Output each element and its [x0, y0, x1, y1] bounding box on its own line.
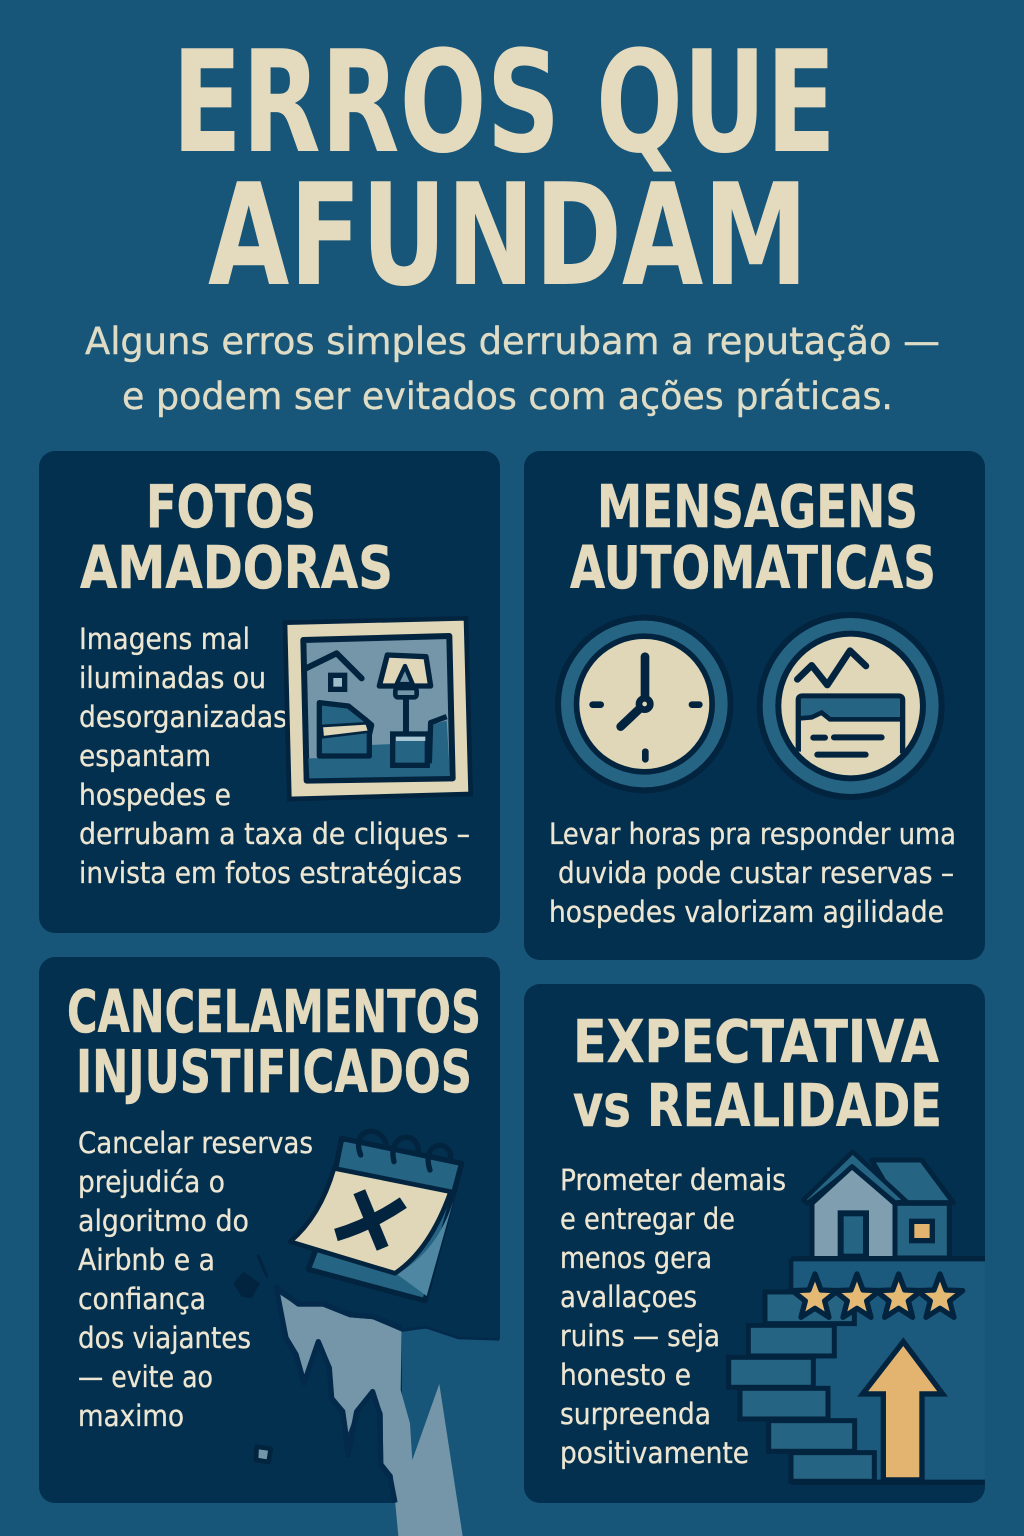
text: expectativa vs realidade: positivamente	[560, 1436, 749, 1470]
panel: mensagens automaticas	[524, 451, 985, 960]
icon: clock	[555, 615, 734, 793]
torn panel corner	[380, 1328, 505, 1536]
text: cancelamentos injustificados: prejudića o	[78, 1165, 225, 1199]
panel: fotos amadoras	[39, 451, 500, 933]
heading: expectativa vs realidade	[573, 1007, 942, 1140]
text: expectativa vs realidade: honesto e	[560, 1358, 691, 1392]
icon: framed photo	[285, 618, 471, 799]
heading: cancelamentos injustificados: INJUSTIFICADOS	[76, 1037, 472, 1106]
title	[172, 21, 836, 318]
icon: message window	[757, 612, 945, 800]
text: cancelamentos injustificados: — evite ao	[78, 1360, 213, 1394]
text: expectativa vs realidade: avallaçoes	[560, 1280, 697, 1314]
text: fotos amadoras: invista em fotos estratégicas	[79, 856, 462, 890]
text: fotos amadoras: desorganizadas	[79, 700, 287, 734]
text: cancelamentos injustificados: Airbnb e a	[78, 1243, 215, 1277]
text: fotos amadoras: hospedes e	[79, 778, 231, 812]
text: expectativa vs realidade: surpreenda	[560, 1397, 711, 1431]
text: mensagens automaticas: duvida pode custar reservas –	[558, 856, 954, 890]
text: mensagens automaticas	[549, 817, 956, 929]
text: cancelamentos injustificados: Cancelar reservas	[78, 1126, 313, 1160]
panel: expectativa vs realidade	[524, 984, 985, 1503]
icon: calendar with X	[290, 1131, 462, 1301]
text: expectativa vs realidade: ruins — seja	[560, 1319, 720, 1353]
heading: fotos amadoras: FOTOS	[146, 472, 316, 541]
text: cancelamentos injustificados: dos viajantes	[78, 1321, 251, 1355]
icon: four stars	[792, 1274, 963, 1317]
heading: cancelamentos injustificados	[67, 977, 481, 1106]
panel: cancelamentos injustificados	[39, 957, 505, 1536]
text: fotos amadoras: Imagens mal	[79, 622, 250, 656]
heading: expectativa vs realidade: EXPECTATIVA	[573, 1007, 939, 1076]
text: fotos amadoras: iluminadas ou	[79, 661, 266, 695]
text: fotos amadoras: derrubam a taxa de cliques –	[79, 817, 470, 851]
subtitle: Alguns erros simples derrubam a reputação —	[85, 320, 940, 363]
heading: mensagens automaticas: MENSAGENS	[597, 472, 918, 541]
text: fotos amadoras: espantam	[79, 739, 211, 773]
text: expectativa vs realidade: e entregar de	[560, 1202, 735, 1236]
icon: house	[803, 1152, 953, 1258]
icon: torn paper and debris	[233, 1256, 499, 1536]
heading: fotos amadoras	[80, 472, 393, 602]
heading: cancelamentos injustificados: CANCELAMENTOS	[67, 977, 481, 1046]
heading: fotos amadoras: AMADORAS	[80, 533, 393, 602]
icon: stairs	[729, 1259, 985, 1482]
text: expectativa vs realidade: menos gera	[560, 1241, 712, 1275]
heading: mensagens automaticas	[570, 472, 936, 602]
subtitle: e podem ser evitados com ações práticas.	[122, 375, 893, 418]
title: AFUNDAM	[208, 154, 808, 318]
text: mensagens automaticas: hospedes valorizam agilidade	[549, 895, 944, 929]
text: expectativa vs realidade: Prometer demais	[560, 1163, 786, 1197]
text: fotos amadoras	[79, 622, 470, 890]
text: mensagens automaticas: Levar horas pra responder uma	[549, 817, 956, 851]
text: cancelamentos injustificados: confiança	[78, 1282, 206, 1316]
text: expectativa vs realidade	[560, 1163, 786, 1470]
text: cancelamentos injustificados: algoritmo do	[78, 1204, 249, 1238]
icon: up arrow	[863, 1342, 943, 1480]
subtitle	[85, 320, 940, 418]
text: cancelamentos injustificados	[78, 1126, 313, 1433]
text: cancelamentos injustificados: maximo	[78, 1399, 184, 1433]
